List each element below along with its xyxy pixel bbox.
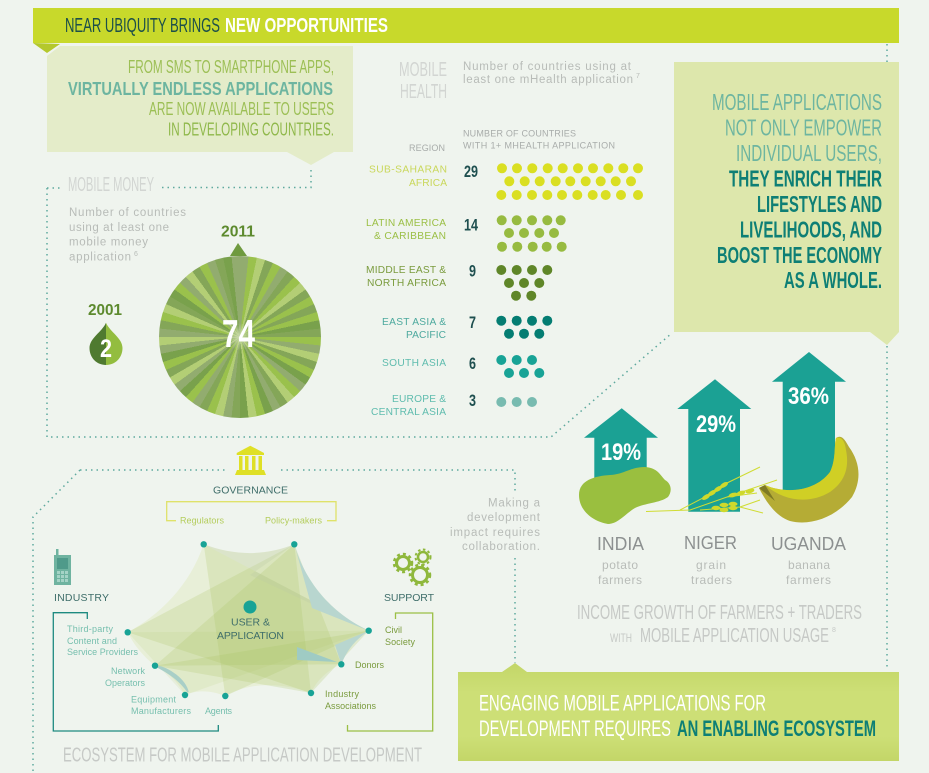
row: sub-saharan africa: SUB-SAHARAN [369,165,447,176]
column headers: NUMBER OF COUNTRIES [463,129,576,139]
group: support: Civil [385,625,402,635]
callout: virtually endless applications [47,46,353,165]
labels: india: potato [602,558,638,572]
labels: india: farmers [598,573,642,587]
text: mobile money description [69,207,186,264]
group: industry [53,592,232,731]
row: europe and central asia: CENTRAL ASIA [371,407,446,418]
row: south asia [382,354,544,378]
row: south asia: 6 [469,354,476,373]
group: industry: Third-party [67,624,114,634]
text: collaboration note: development [467,512,541,524]
group: industry: Agents [205,706,232,716]
text: mobile health description: Number of countries using at [463,61,632,73]
text: mobile health description [463,61,640,86]
2011 radial chart: 74 [222,313,255,356]
group: industry: Equipment [131,695,176,705]
row: europe and central asia: EUROPE & [392,394,446,405]
group: support [325,592,435,731]
chart caption: ecosystem: ECOSYSTEM FOR MOBILE APPLICATION DEVELOPMENT [63,745,422,767]
panel: mobile money [68,174,321,418]
text: collaboration note: collaboration. [462,541,540,553]
heading: mobile money: MOBILE MONEY [68,174,154,196]
2001 drop icon: 2 [100,335,112,363]
row: latin america and caribbean: & CARIBBEAN [374,231,446,242]
row: sub-saharan africa [369,162,643,200]
arrow: uganda 36% [772,352,846,495]
arrow: niger 29% [677,379,751,512]
arrow: uganda 36%: 36% [788,383,829,410]
row: sub-saharan africa: 29 [464,162,478,181]
heading: mobile health: HEALTH [400,81,447,103]
label: governance: Policy-makers [265,515,322,525]
panel: income growth [577,352,862,647]
arrow: niger 29%: 29% [696,411,736,438]
labels: uganda [771,534,846,587]
group: industry: Service Providers [67,647,138,657]
network web: APPLICATION [217,630,284,642]
arrow: india 19%: 19% [601,439,641,466]
row: middle east and north africa: MIDDLE EAST & [366,265,446,276]
group: industry: INDUSTRY [54,592,109,604]
row: europe and central asia: 3 [469,391,476,410]
chart caption: income growth: 8 [832,627,836,634]
group: industry: Manufacturers [131,706,192,716]
label: governance [167,484,336,525]
labels: india [597,534,644,587]
text: mobile money description: mobile money [69,236,148,248]
2011 radial chart [159,224,321,418]
column headers: WITH 1+ MHEALTH APPLICATION [463,141,615,151]
row: middle east and north africa: 9 [469,262,476,281]
text: mobile health description: least one mHealth application [463,74,633,86]
group: industry: Content and [67,636,117,646]
chart caption: income growth [577,602,862,647]
text: collaboration note: impact requires [450,527,540,539]
header banner: NEW OPPORTUNITIES [225,15,388,37]
network web [124,541,372,699]
panel: mobile health [366,59,643,418]
header banner [33,8,899,53]
row: east asia and pacific: 7 [469,313,476,332]
arrow: india 19% [584,408,658,500]
column headers: REGION [409,143,445,153]
label: governance: Regulators [180,515,224,525]
callout: virtually endless applications: ARE NOW AVAILABLE TO USERS [149,99,334,119]
row: east asia and pacific: EAST ASIA & [382,317,446,328]
labels: uganda: farmers [786,573,831,587]
group: industry: Network [111,666,146,676]
row: sub-saharan africa: AFRICA [409,178,447,189]
column headers [409,129,615,153]
group: support: Industry [325,689,360,699]
group: support: Associations [325,701,376,711]
text: mobile money description: 6 [134,251,138,258]
callout: virtually endless applications: VIRTUALLY ENDLESS APPLICATIONS [68,79,333,99]
heading: mobile health: MOBILE [399,59,447,81]
text: mobile money description: using at least one [69,222,169,234]
text: mobile health description: 7 [636,73,640,80]
labels: uganda: banana [788,558,830,572]
heading: mobile health [399,59,447,103]
group: industry: Operators [105,678,146,688]
row: east asia and pacific: PACIFIC [406,330,446,341]
2011 radial chart: 2011 [221,224,255,241]
labels: niger [684,533,737,587]
row: east asia and pacific [382,313,552,341]
labels: uganda: UGANDA [771,534,846,554]
row: middle east and north africa: NORTH AFRICA [367,278,446,289]
text: collaboration note [450,498,541,553]
callout: enabling ecosystem [458,663,899,761]
text: mobile money description: Number of countries [69,207,186,219]
text: collaboration note: Making a [488,498,541,510]
row: latin america and caribbean [366,215,567,252]
callout: virtually endless applications: IN DEVELOPING COUNTRIES. [168,120,334,140]
text: mobile money description: application [69,252,131,264]
icon: mobile phone [54,549,71,585]
row: middle east and north africa [366,262,552,301]
callout: enabling ecosystem: DEVELOPMENT REQUIRES [479,716,671,741]
row: europe and central asia [371,391,537,418]
icon: gears [394,550,430,585]
chart caption: income growth: MOBILE APPLICATION USAGE [640,625,829,647]
icon: potato [579,467,671,524]
callout: mobile applications enrich lifestyles [674,62,899,345]
labels: niger: grain [696,558,726,572]
group: support: Donors [355,660,384,670]
labels: niger: NIGER [684,533,737,553]
row: latin america and caribbean: LATIN AMERICA [366,218,446,229]
2001 drop icon [88,302,122,365]
group: support: Society [385,637,416,647]
chart caption: income growth: WITH [610,631,632,645]
icon: governance building [235,446,266,475]
group: support: SUPPORT [384,592,435,604]
icon: grain [646,467,777,513]
callout: virtually endless applications: FROM SMS TO SMARTPHONE APPS, [128,57,334,77]
icon: banana [759,437,858,522]
panel: ecosystem diagram [53,446,435,767]
callout: enabling ecosystem: ENGAGING MOBILE APPLICATIONS FOR [479,691,766,716]
header banner: NEAR UBIQUITY BRINGS [65,15,220,37]
label: governance: GOVERNANCE [213,484,288,496]
row: south asia: SOUTH ASIA [382,358,446,369]
labels: india: INDIA [597,534,644,554]
network web: USER & [231,616,270,628]
row: latin america and caribbean: 14 [464,216,478,235]
2001 drop icon: 2001 [88,302,122,319]
labels: niger: traders [691,573,732,587]
